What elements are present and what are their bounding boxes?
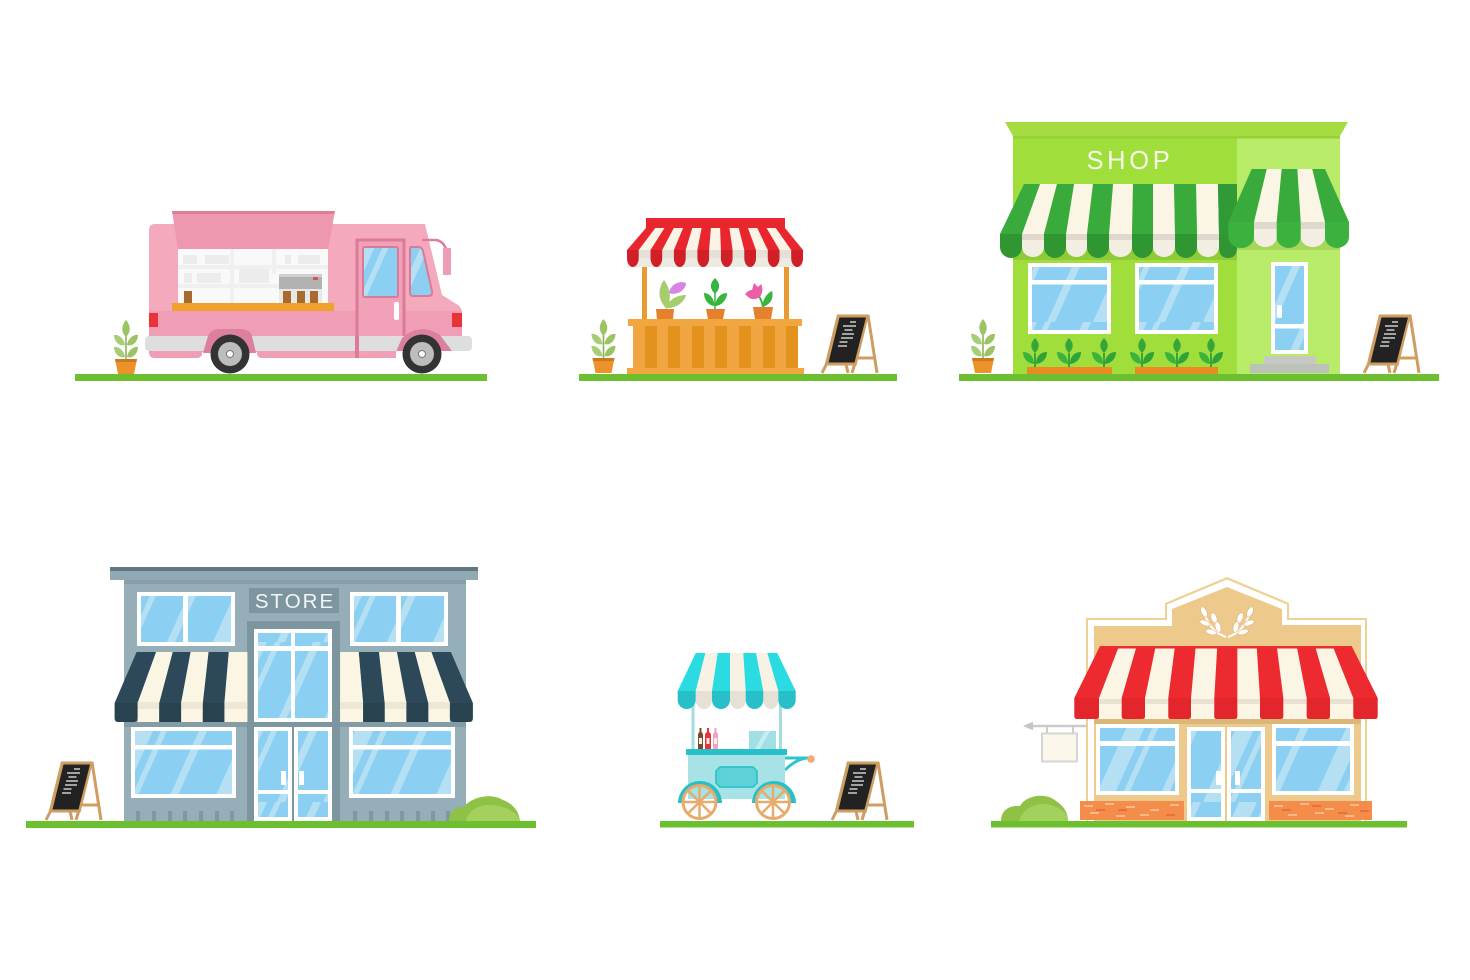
panel: grey store bbox=[26, 567, 536, 828]
ground: stall bbox=[579, 374, 897, 381]
store sign: STORE bbox=[255, 590, 335, 613]
shop windows bbox=[1030, 265, 1216, 332]
icon: menu board store bbox=[46, 762, 101, 820]
cafe windows bbox=[1098, 726, 1352, 793]
building walls bbox=[1005, 122, 1348, 374]
store walls bbox=[124, 580, 466, 821]
bottles bbox=[698, 728, 718, 749]
ground: truck bbox=[75, 374, 487, 381]
potted flowers bbox=[656, 278, 773, 319]
panel: green shop bbox=[959, 122, 1439, 381]
icon: potted plant left of shop bbox=[971, 319, 995, 373]
main awning bbox=[1000, 184, 1237, 258]
icon: potted plant left of truck bbox=[114, 320, 138, 374]
bumper strip bbox=[145, 336, 472, 351]
icon: potted plant left of stall bbox=[592, 319, 616, 373]
posts bbox=[642, 265, 789, 321]
wheel arches bbox=[203, 329, 452, 353]
cart wheels bbox=[678, 781, 796, 819]
icon: bush bbox=[1001, 796, 1068, 821]
panel: food truck bbox=[75, 211, 487, 381]
icon: bush bbox=[449, 796, 520, 821]
truck body bbox=[149, 224, 462, 358]
icon: menu board cart bbox=[832, 762, 887, 820]
serving window bbox=[178, 249, 328, 303]
icon: menu board shop bbox=[1364, 314, 1419, 373]
cab side window bbox=[410, 247, 432, 296]
coffee machine bbox=[184, 274, 322, 303]
mirror bbox=[422, 240, 451, 275]
left awning bbox=[115, 652, 247, 722]
wall vents bbox=[136, 811, 450, 821]
lower windows bbox=[133, 729, 453, 796]
ground: cafe bbox=[991, 821, 1407, 828]
brick bases bbox=[1080, 801, 1372, 820]
truck door bbox=[357, 240, 404, 358]
counter shelf bbox=[172, 303, 334, 311]
side awning bbox=[1228, 169, 1349, 250]
panel: flower stall bbox=[579, 218, 897, 381]
roof bbox=[110, 567, 478, 584]
panel: food cart bbox=[660, 653, 914, 828]
shop door bbox=[1273, 264, 1306, 352]
front and rear wheels bbox=[210, 334, 442, 374]
ground: cart bbox=[660, 821, 914, 828]
tail and head lights bbox=[149, 313, 462, 327]
right awning bbox=[340, 652, 473, 722]
wooden counter bbox=[627, 319, 804, 374]
entrance bbox=[247, 621, 340, 821]
hanging sign bbox=[1023, 722, 1086, 762]
upper windows bbox=[139, 594, 446, 644]
facade with pediment bbox=[1086, 577, 1367, 821]
cart handle bbox=[785, 755, 815, 770]
truck awning flap bbox=[172, 211, 335, 249]
cafe doors bbox=[1189, 729, 1263, 819]
ground: store bbox=[26, 821, 536, 828]
striped awning bbox=[627, 218, 803, 267]
icon: laurel emblem bbox=[1199, 606, 1255, 637]
ground: shop bbox=[959, 374, 1439, 381]
striped awning bbox=[678, 653, 796, 709]
shop sign: SHOP bbox=[1086, 147, 1174, 175]
under-awning shadow bbox=[124, 722, 466, 727]
planters with seedlings bbox=[1023, 338, 1223, 374]
awning posts bbox=[692, 700, 782, 750]
glass display bbox=[749, 731, 776, 749]
panel: cafe bbox=[991, 577, 1407, 828]
striped awning bbox=[1074, 646, 1378, 719]
door steps bbox=[1264, 356, 1316, 364]
icon: menu board stall bbox=[822, 314, 877, 373]
cart body bbox=[686, 749, 787, 799]
